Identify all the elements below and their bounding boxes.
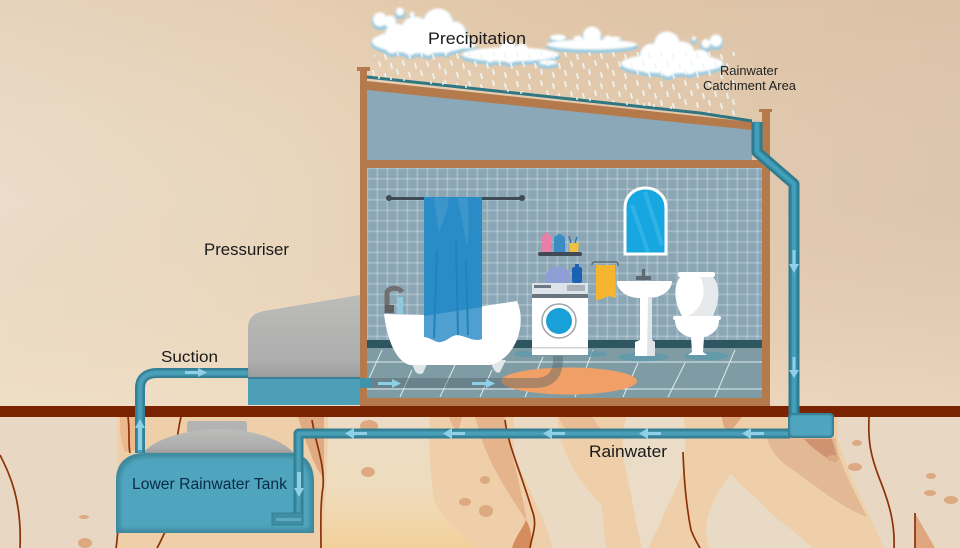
roof catchment surface xyxy=(367,77,752,121)
labels xyxy=(132,29,797,493)
arrow: rainwater 5 xyxy=(345,428,367,439)
label: precipitation: Precipitation xyxy=(428,29,526,48)
floor pipe xyxy=(360,356,558,383)
suction pipe xyxy=(140,373,248,453)
house xyxy=(357,67,772,407)
ground line xyxy=(0,406,960,417)
label: rainwater catchment area xyxy=(703,63,797,93)
arrow: rainwater 4 xyxy=(443,428,465,439)
label: rainwater: Rainwater xyxy=(589,442,667,461)
attic space xyxy=(367,88,752,160)
label: rainwater catchment area: Rainwater xyxy=(720,63,779,78)
sink xyxy=(617,269,672,356)
rainwater supply pipe xyxy=(298,434,790,518)
shelf with bottles xyxy=(538,232,582,256)
bathtub xyxy=(384,288,521,374)
arrow: rainwater 2 xyxy=(639,428,661,439)
arrow: floor pipe 1 xyxy=(378,379,401,388)
cloud white layer xyxy=(372,8,723,76)
soil pebbles xyxy=(78,420,958,548)
label: lower rainwater tank: Lower Rainwater Tank xyxy=(132,476,287,493)
arrow: riser up xyxy=(135,419,145,450)
label: pressuriser: Pressuriser xyxy=(204,241,290,259)
bathroom tiled wall xyxy=(367,168,762,342)
shower curtain xyxy=(424,197,482,342)
downpipe from roof xyxy=(757,122,794,415)
arrow: floor pipe 2 xyxy=(472,379,495,388)
flow arrows xyxy=(135,250,799,497)
label: rainwater catchment area: Catchment Area xyxy=(703,78,797,93)
arrow: tank inlet xyxy=(294,472,304,497)
cloud shadow layer xyxy=(372,10,723,79)
label: suction: Suction xyxy=(161,349,218,366)
shower rod xyxy=(386,195,525,201)
rain xyxy=(372,52,735,116)
floor shadows xyxy=(514,351,728,362)
underground soil layers xyxy=(0,417,960,548)
tub body xyxy=(384,301,521,365)
washing machine xyxy=(532,283,588,355)
arrow: rainwater 1 xyxy=(742,428,764,439)
pipe junction box xyxy=(788,413,834,438)
brown walls and beams xyxy=(357,67,772,407)
arrow: rainwater 3 xyxy=(543,428,565,439)
arrow: downpipe upper xyxy=(789,250,799,273)
arrow: suction xyxy=(185,368,207,377)
raindrops hitting roof xyxy=(379,76,671,109)
mirror xyxy=(625,188,666,254)
tub feet xyxy=(411,360,506,374)
tank dome and cap xyxy=(143,421,294,453)
lower rainwater tank xyxy=(116,421,314,533)
clouds xyxy=(372,8,723,79)
pressuriser tank xyxy=(248,295,360,405)
rug xyxy=(501,368,637,394)
toilet xyxy=(673,272,721,355)
towel xyxy=(592,262,618,300)
pipes xyxy=(140,122,794,518)
roots xyxy=(0,417,915,548)
arrow: downpipe lower xyxy=(789,357,799,378)
house floor xyxy=(367,340,762,398)
tub faucet xyxy=(385,288,403,314)
tank body xyxy=(116,453,314,533)
tank inlet diffuser xyxy=(272,513,303,525)
laundry and detergent xyxy=(546,264,582,283)
